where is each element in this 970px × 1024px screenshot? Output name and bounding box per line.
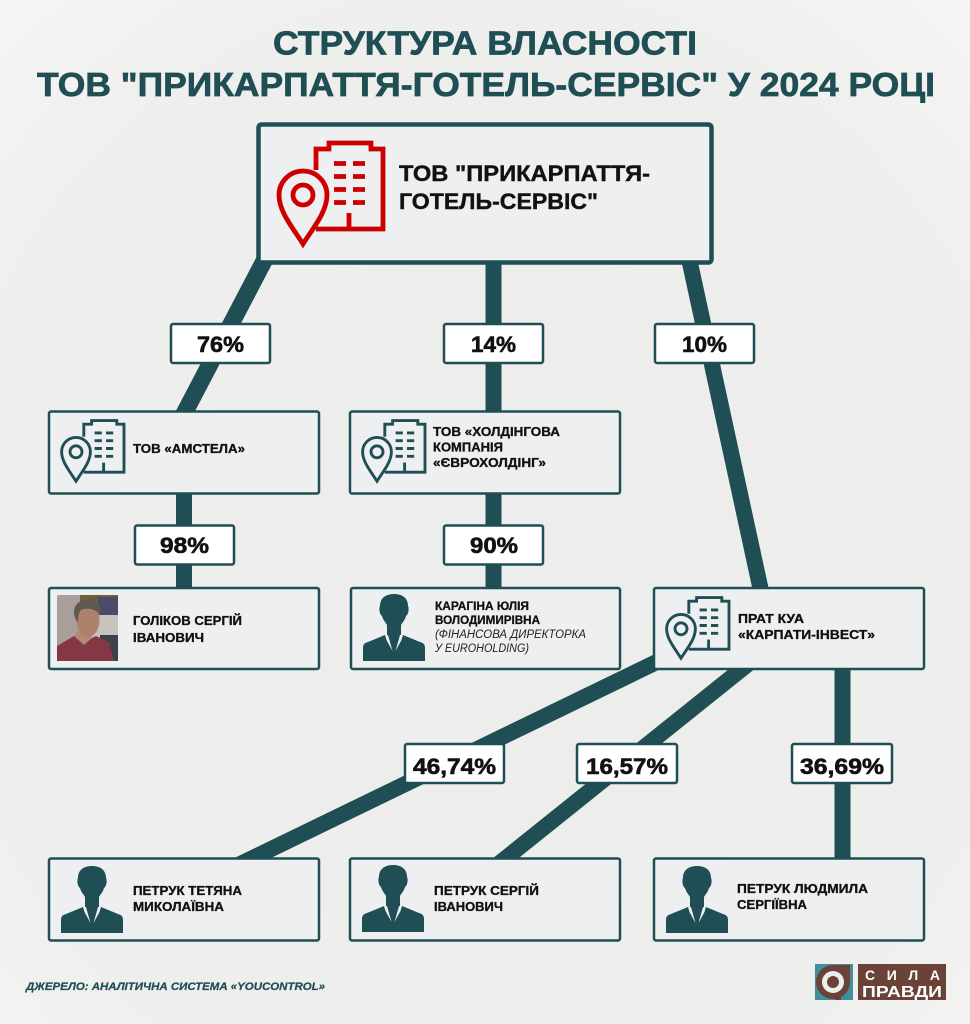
- name: ПЕТРУК ЛЮДМИЛА: [737, 882, 868, 896]
- name: ІВАНОВИЧ: [434, 900, 503, 914]
- source note: ДЖЕРЕЛО: АНАЛІТИЧНА СИСТЕМА «YOUCONTROL»: [25, 981, 325, 993]
- label: 14%: [444, 324, 543, 363]
- name: [433, 425, 560, 470]
- name: «ЄВРОХОЛДІНГ»: [433, 456, 546, 470]
- name: МИКОЛАЇВНА: [133, 899, 224, 914]
- title: [37, 24, 935, 103]
- name: ПЕТРУК СЕРГІЙ: [434, 883, 539, 898]
- icon: building with pin: [667, 598, 729, 658]
- icon: building with pin: [363, 421, 425, 481]
- name: ГОЛІКОВ СЕРГІЙ: [133, 613, 242, 628]
- label: 90%: 90%: [470, 533, 518, 558]
- company name: ТОВ "ПРИКАРПАТТЯ-: [399, 161, 650, 186]
- name: ВОЛОДИМИРІВНА: [435, 613, 540, 627]
- icon: person: [362, 865, 424, 932]
- panel: Karagina: [351, 588, 620, 669]
- name: ТОВ «ХОЛДІНГОВА: [433, 425, 560, 439]
- company name: [399, 161, 650, 214]
- name: [434, 599, 586, 655]
- label: 46,74%: [405, 744, 504, 783]
- logo: Syla Pravdy: ПРАВДИ: [862, 984, 942, 1001]
- name: [133, 884, 242, 914]
- panel: Karpaty-Invest: [654, 588, 924, 669]
- name: [133, 613, 242, 645]
- panel: Petruk Serhii: [350, 858, 620, 940]
- name: ПРАТ КУА: [738, 612, 804, 626]
- name: ПЕТРУК ТЕТЯНА: [133, 884, 242, 898]
- title: ТОВ "ПРИКАРПАТТЯ-ГОТЕЛЬ-СЕРВІС" У 2024 РОЦІ: [37, 66, 935, 103]
- panel: Holikov: [49, 588, 319, 669]
- label: 46,74%: 46,74%: [413, 754, 496, 779]
- label: 36,69%: 36,69%: [800, 754, 884, 779]
- label: 90%: [444, 526, 543, 564]
- icon: building with pin: [62, 421, 124, 481]
- logo: Syla Pravdy: [815, 964, 946, 1001]
- icon: person: [363, 594, 425, 661]
- label: 36,69%: [792, 744, 892, 783]
- icon: red building with location pin: [279, 143, 383, 244]
- label: 76%: [171, 324, 270, 363]
- name: ТОВ «АМСТЕЛА»: [133, 442, 245, 456]
- label: 98%: [135, 526, 234, 564]
- name: (ФІНАНСОВА ДИРЕКТОРКА: [435, 629, 586, 641]
- icon: person: [61, 866, 123, 933]
- label: 10%: 10%: [682, 332, 727, 357]
- name: [434, 883, 539, 914]
- panel: Petruk Liudmyla: [654, 858, 924, 940]
- name: КАРАГІНА ЮЛІЯ: [435, 599, 529, 613]
- label: 98%: 98%: [160, 533, 209, 558]
- name: [737, 882, 868, 912]
- logo: Syla Pravdy: СИЛА: [865, 967, 940, 983]
- company name: ГОТЕЛЬ-СЕРВІС": [399, 189, 598, 214]
- photo: Holikov: [57, 595, 118, 661]
- label: 76%: 76%: [197, 332, 244, 357]
- label: 16,57%: 16,57%: [586, 754, 668, 779]
- name: КОМПАНІЯ: [433, 440, 503, 454]
- name: ІВАНОВИЧ: [133, 631, 204, 645]
- icon: person: [666, 866, 728, 933]
- label: 16,57%: [577, 744, 677, 783]
- label: 14%: 14%: [471, 332, 516, 357]
- name: СЕРГІЇВНА: [737, 897, 807, 912]
- panel: Petruk Tetiana: [49, 858, 319, 940]
- title: СТРУКТУРА ВЛАСНОСТІ: [273, 24, 697, 62]
- panel: Euroholding: [350, 412, 620, 494]
- name: У EUROHOLDING): [434, 643, 529, 655]
- panel: main company: [258, 124, 712, 262]
- panel: Amstela: [49, 412, 319, 494]
- connector lines: [176, 240, 842, 870]
- label: 10%: [655, 324, 754, 363]
- name: [738, 612, 875, 642]
- name: «КАРПАТИ-ІНВЕСТ»: [738, 628, 875, 642]
